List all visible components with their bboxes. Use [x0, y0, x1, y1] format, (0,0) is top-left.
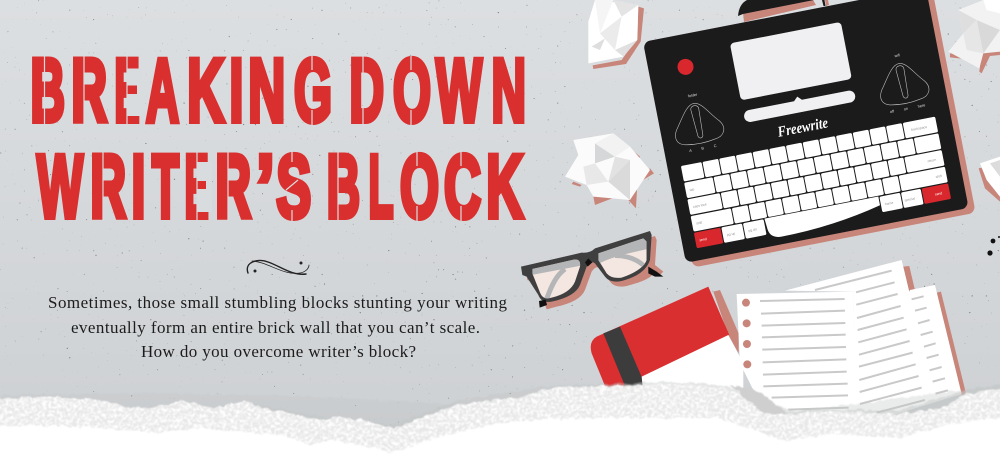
- title: E: [185, 137, 209, 236]
- left lens: [532, 259, 580, 298]
- left dial: folder: [670, 99, 726, 148]
- keyboard: special: [904, 196, 916, 202]
- title: A: [146, 41, 179, 140]
- red power button: [676, 57, 695, 76]
- right lens: [598, 238, 647, 278]
- title: T: [152, 137, 179, 236]
- right sheet: [857, 285, 962, 420]
- tear white layer: [0, 417, 1000, 465]
- handle: [738, 0, 829, 22]
- tear shadow: [0, 384, 1000, 465]
- title: N: [248, 41, 285, 140]
- title: D: [350, 41, 384, 140]
- glasses shadow: [526, 236, 663, 309]
- intro paragraph: eventually form an entire brick wall that you can’t scale.: [71, 318, 480, 337]
- screen: [730, 22, 852, 100]
- keyboard: pg up: [726, 231, 736, 237]
- title: B: [30, 41, 65, 140]
- right dial: wifi: [875, 59, 931, 108]
- flourish divider: [247, 260, 309, 274]
- title: ’: [256, 137, 274, 236]
- keyboard: shift: [696, 221, 703, 226]
- keyboard: send: [699, 237, 707, 242]
- title: L: [368, 137, 394, 236]
- title: I: [230, 41, 243, 140]
- keyboard: return: [927, 158, 937, 163]
- icon: crumpled paper middle: [565, 133, 654, 208]
- status bar: [742, 86, 856, 123]
- title: R: [215, 137, 251, 236]
- keyboard: send: [935, 191, 943, 197]
- keyboard: backspace: [911, 125, 928, 132]
- title: K: [187, 41, 224, 140]
- device body: A B C: [689, 144, 717, 153]
- icon: crumpled paper top: [588, 0, 644, 69]
- title: [30, 41, 526, 236]
- back sheet: [785, 260, 933, 417]
- keyboard: shift: [935, 174, 942, 179]
- tear shadow right: [250, 382, 1000, 440]
- ruled lines: [760, 271, 948, 413]
- bridge nose pad: [585, 258, 592, 267]
- title: B: [327, 137, 360, 236]
- device body: off on here: [889, 103, 926, 114]
- device: Freewrite typewriter: [643, 0, 976, 268]
- front sheet: [737, 292, 857, 420]
- intro paragraph: Sometimes, those small stumbling blocks stunting your writing: [48, 293, 508, 312]
- torn paper edge: [0, 382, 1000, 465]
- paper cast shadow: [730, 385, 788, 414]
- title: S: [276, 137, 311, 236]
- temple tips: [539, 300, 547, 308]
- device body: [643, 0, 969, 263]
- icon: red notebook: [591, 287, 743, 393]
- icon: stack of note sheets: [737, 260, 966, 420]
- tear light layer: [0, 384, 1000, 465]
- title: I: [132, 137, 145, 236]
- title: G: [294, 41, 332, 140]
- device body: folder: [688, 93, 698, 98]
- title: W: [436, 41, 482, 140]
- binder holes: [742, 299, 751, 368]
- intro paragraph: How do you overcome writer’s block?: [141, 342, 416, 361]
- keyboard: caps lock: [693, 202, 707, 209]
- icon: ink dots: [987, 236, 1000, 256]
- device body: wifi: [894, 53, 901, 58]
- icon: crumpled paper top right: [948, 0, 1000, 73]
- title: N: [492, 41, 526, 140]
- title: O: [400, 137, 439, 236]
- keyboard: [681, 117, 952, 253]
- title: K: [486, 137, 523, 236]
- keyboard: tab: [689, 187, 695, 192]
- title: C: [444, 137, 481, 236]
- title: O: [393, 41, 431, 140]
- brand logo: Freewrite: [775, 115, 830, 141]
- icon: glasses: [521, 231, 663, 309]
- keyboard: home: [885, 201, 894, 206]
- device shadow: [650, 0, 976, 268]
- title: E: [114, 41, 140, 140]
- icon: crumpled paper right edge: [979, 157, 1000, 202]
- title: W: [37, 137, 83, 236]
- title: R: [71, 41, 107, 140]
- keyboard: pg dn: [748, 227, 757, 233]
- title: R: [90, 137, 126, 236]
